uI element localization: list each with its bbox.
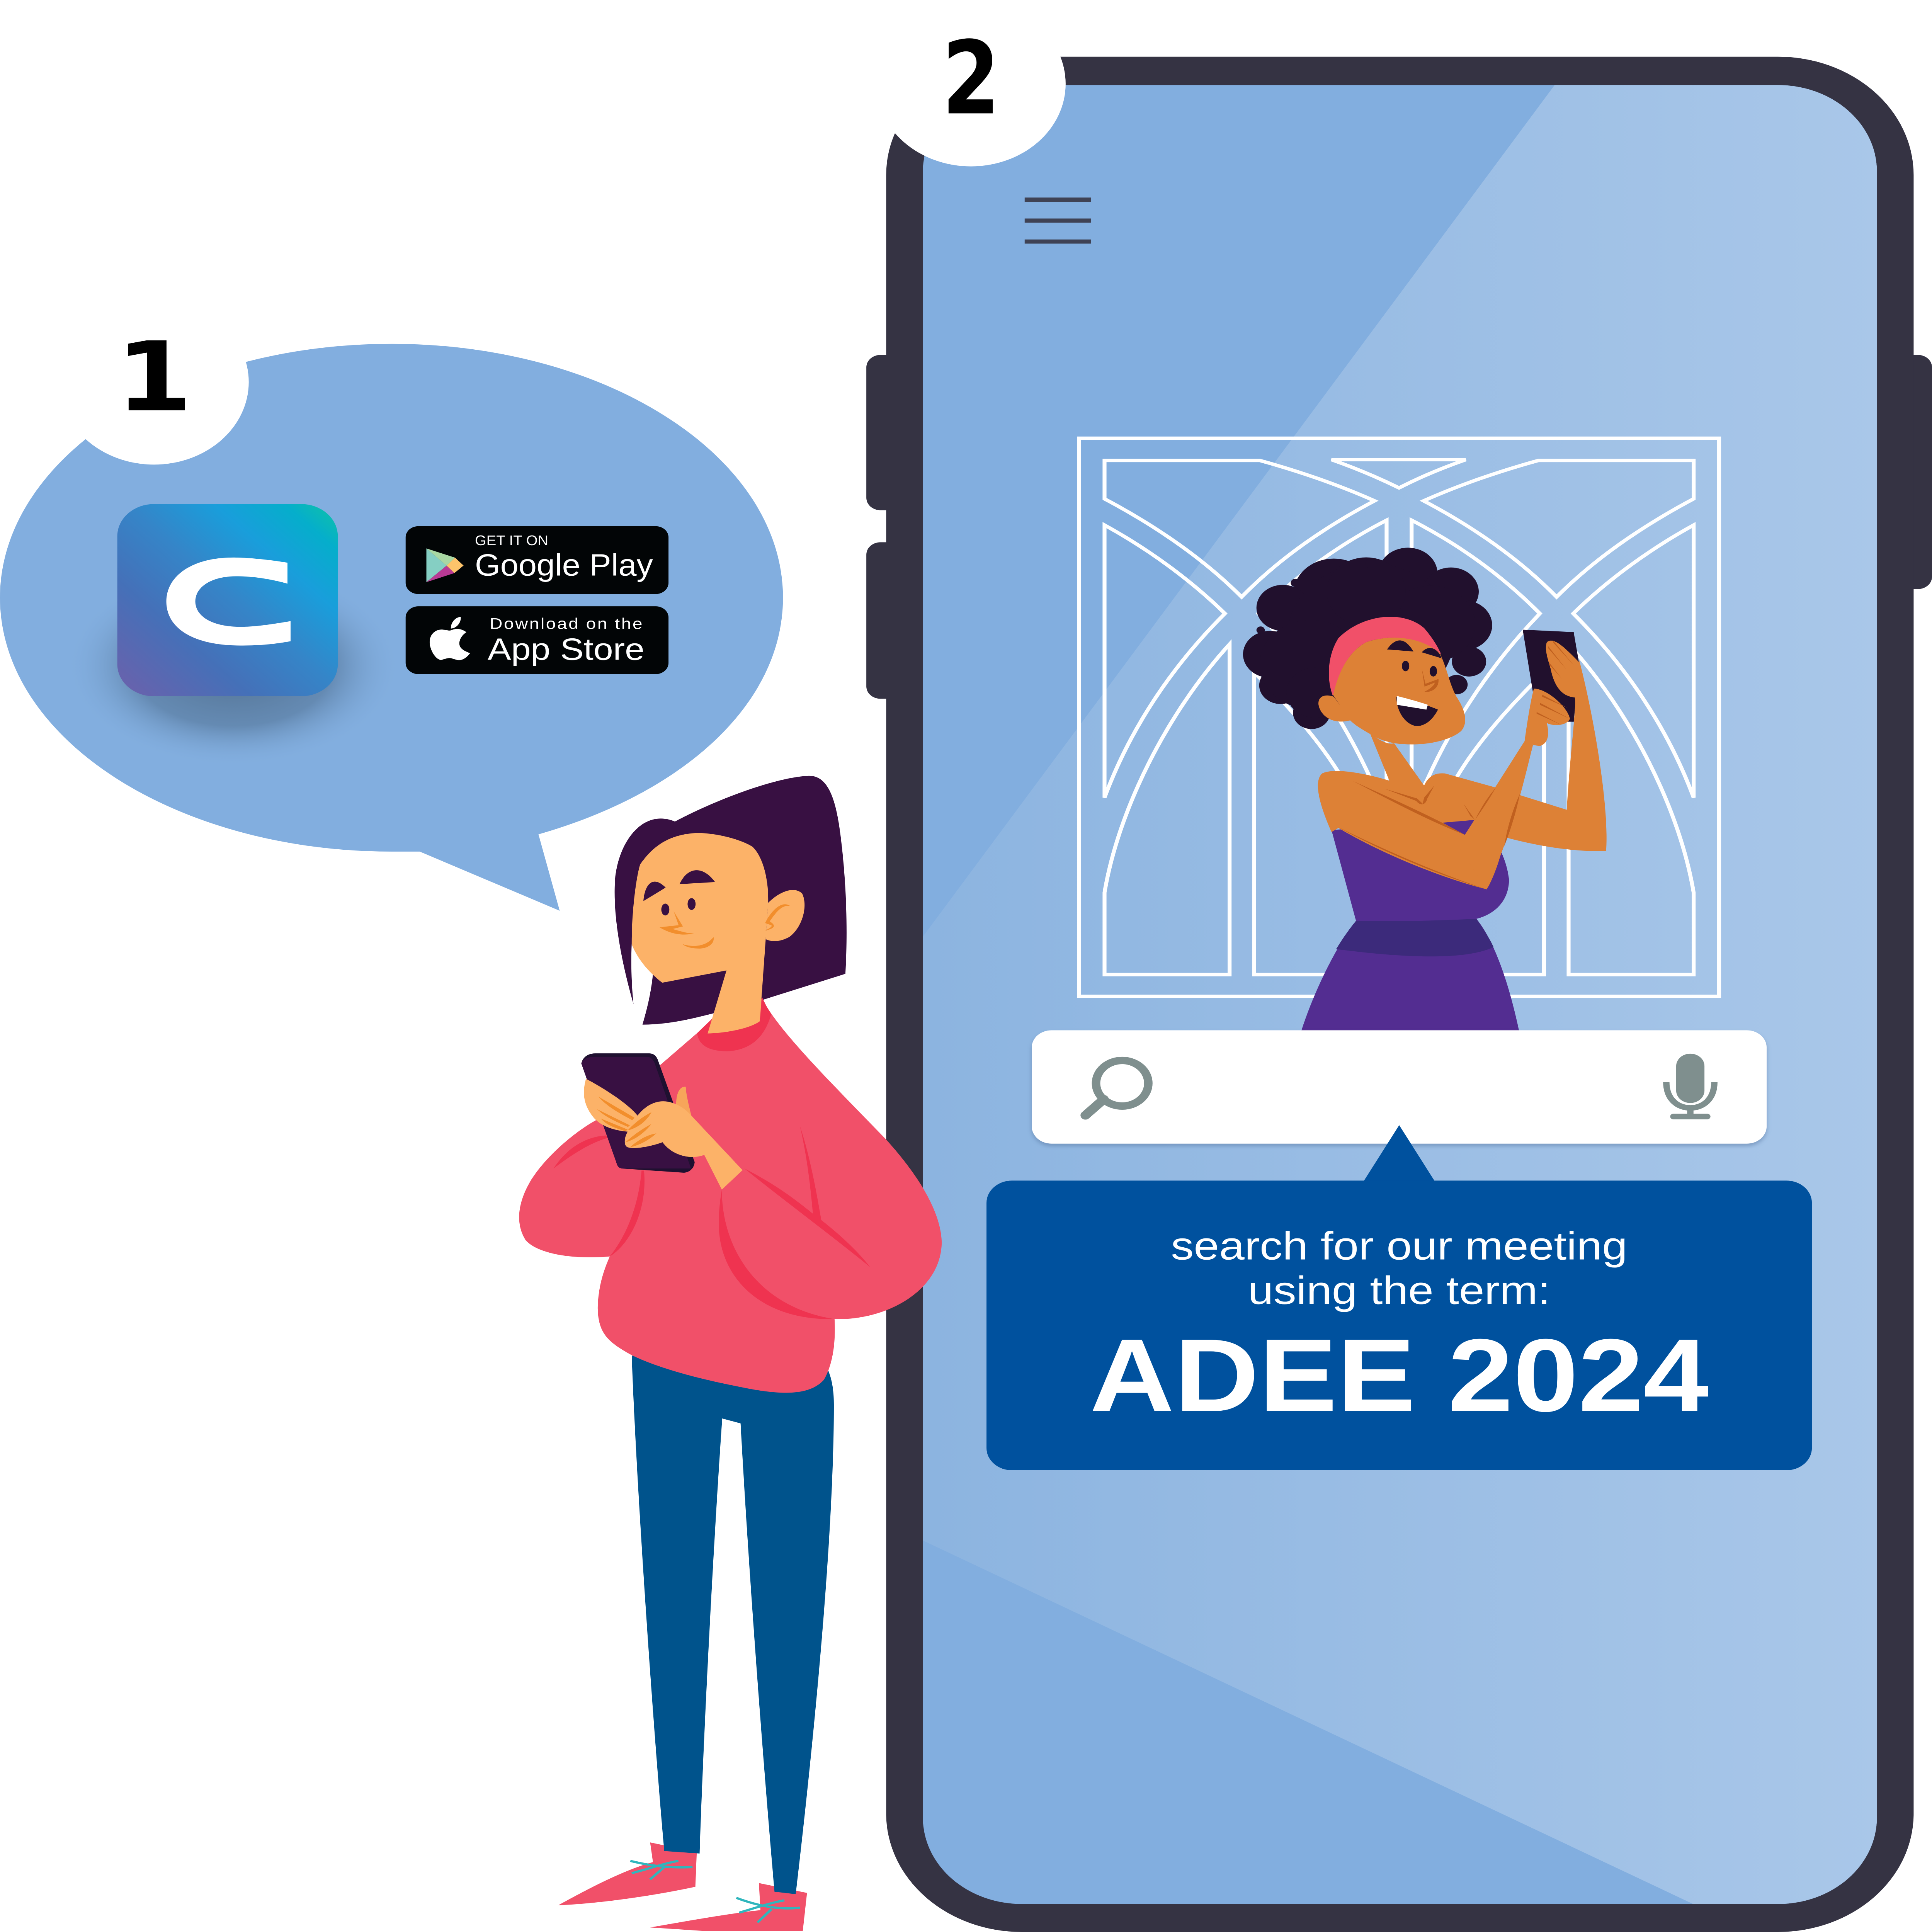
number 1: 1 xyxy=(116,321,192,434)
sweater fold lines xyxy=(554,1126,870,1319)
smile xyxy=(683,937,714,949)
icon: play triangle xyxy=(427,548,464,582)
headband xyxy=(1329,617,1441,696)
jeans xyxy=(632,1355,834,1894)
fingers behind phone xyxy=(1546,641,1579,697)
Google Play badge xyxy=(406,526,668,594)
search bar shadow xyxy=(1032,1033,1767,1146)
search term: ADEE 2024 xyxy=(1090,1318,1709,1433)
nose xyxy=(660,911,694,935)
ear xyxy=(766,890,804,941)
eyes xyxy=(1402,661,1437,677)
character: woman in pink sweater using a phone xyxy=(519,776,942,1931)
dress belt xyxy=(1336,919,1493,956)
thumb xyxy=(676,1087,692,1117)
step 1 badge xyxy=(60,299,249,464)
instruction text: search for our meeting xyxy=(1171,1224,1628,1268)
callout: search term xyxy=(986,1125,1812,1470)
small label: GET IT ON xyxy=(475,533,548,548)
icon tile xyxy=(117,504,338,696)
neck and face xyxy=(632,833,768,1034)
phone body xyxy=(886,57,1913,1932)
icon: magnifying glass xyxy=(1085,1060,1148,1115)
bubble shape xyxy=(0,344,783,911)
callout box xyxy=(986,1180,1812,1470)
arm creases xyxy=(1337,640,1574,889)
instruction text line 2: using the term: xyxy=(1248,1269,1550,1313)
mouth xyxy=(1396,697,1438,726)
shoelaces xyxy=(630,1861,800,1922)
icon: apple xyxy=(430,617,470,660)
hands xyxy=(584,1079,743,1190)
badge circle xyxy=(60,299,249,464)
store name: App Store xyxy=(488,632,645,667)
left shoe xyxy=(558,1842,697,1905)
eyebrows xyxy=(643,870,715,901)
finger lines xyxy=(597,1097,656,1147)
badge circle xyxy=(876,1,1066,167)
icon letter C xyxy=(167,558,291,646)
sweater collar xyxy=(697,997,771,1051)
phone xyxy=(581,1053,695,1173)
phone screen xyxy=(923,85,1877,1904)
upper body, scaled from detail xyxy=(519,776,942,1393)
speech bubble xyxy=(0,344,783,911)
badge background xyxy=(406,606,668,674)
arms and shoulders xyxy=(1318,660,1607,889)
phone face xyxy=(581,1057,691,1168)
search bar xyxy=(1032,1030,1767,1146)
phone xyxy=(866,57,1932,1932)
phone held up xyxy=(1523,630,1579,722)
afro hair xyxy=(1243,548,1492,729)
ear xyxy=(1318,696,1351,721)
callout pointer xyxy=(1362,1125,1436,1183)
dress xyxy=(1301,820,1519,1031)
step 2 badge xyxy=(876,1,1066,167)
phone side buttons xyxy=(866,355,1932,699)
search bar field xyxy=(1032,1030,1767,1144)
hand on phone xyxy=(1525,689,1570,746)
forearm xyxy=(1445,741,1533,889)
number 2: 2 xyxy=(942,20,1000,138)
hamburger menu icon xyxy=(1025,200,1091,242)
eyebrows xyxy=(1387,640,1442,658)
hair xyxy=(615,776,847,1025)
dress neckline gap xyxy=(1442,820,1475,835)
eyes xyxy=(661,898,696,915)
teeth xyxy=(1397,696,1428,710)
ear detail xyxy=(765,904,791,931)
app icon shadow xyxy=(66,565,400,767)
nose xyxy=(1422,668,1439,692)
icon: microphone xyxy=(1666,1054,1714,1117)
store name: Google Play xyxy=(475,548,653,582)
right shoe xyxy=(650,1883,807,1931)
window outline xyxy=(1079,438,1719,997)
badge background xyxy=(406,526,668,594)
app icon xyxy=(117,504,338,696)
head xyxy=(1333,638,1465,745)
character: woman in purple dress taking a selfie xyxy=(1243,548,1607,1031)
App Store badge xyxy=(406,606,668,674)
sweater xyxy=(519,998,942,1393)
small label: Download on the xyxy=(490,615,642,633)
